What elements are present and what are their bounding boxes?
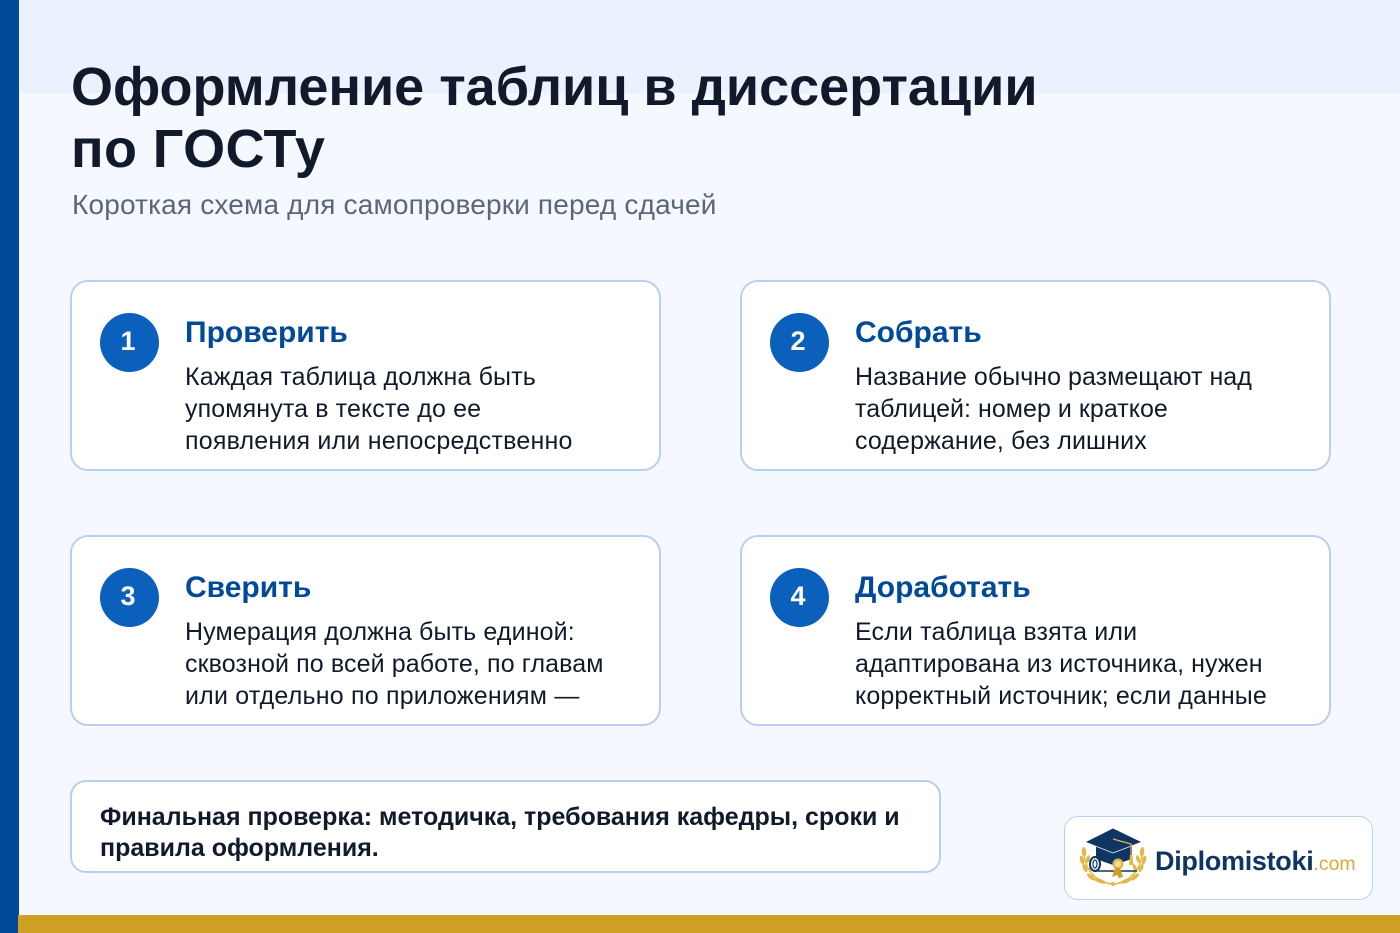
left accent bar [0,0,19,933]
step 3 heading: Сверить [185,571,311,604]
logo card [1064,816,1373,900]
title: Оформление таблиц в диссертации [71,57,1038,117]
step 1 text: упомянута в тексте до ее [185,395,481,423]
step 4 text [855,618,1267,710]
step 4 heading: Доработать [855,571,1031,604]
callout text [100,803,900,862]
logo wordmark: Diplomistoki.com [1155,846,1356,876]
step number 2: 2 [790,326,806,356]
icon: graduation cap with laurel wreath [1080,828,1146,886]
step number 1 [100,313,159,372]
step 2 text: таблицей: номер и краткое [855,395,1168,423]
subtitle: Короткая схема для самопроверки перед сдачей [72,189,717,220]
step 1 text [185,363,573,455]
step 2 text: Название обычно размещают над [855,363,1252,391]
panel: step 3 [70,535,661,726]
step 2 heading: Собрать [855,316,982,349]
callout text: Финальная проверка: методичка, требования кафедры, сроки и [100,803,900,831]
step 1 heading: Проверить [185,316,348,349]
step 3 text [185,618,604,710]
step 4 text: адаптирована из источника, нужен [855,650,1263,678]
step number 4: 4 [790,581,806,611]
callout: final check [70,780,941,873]
step number 1: 1 [120,326,136,356]
step number 3 [100,568,159,627]
step number 4 [770,568,829,627]
step 1 text: появления или непосредственно [185,427,573,455]
title [71,57,1038,179]
step 3 text: сквозной по всей работе, по главам [185,650,604,678]
bottom gold bar [18,915,1400,933]
step 2 text: содержание, без лишних [855,427,1147,455]
step 4 text: корректный источник; если данные [855,682,1267,710]
step 2 text [855,363,1252,455]
step 3 text: или отдельно по приложениям — [185,682,580,710]
title: по ГОСТу [71,119,325,179]
step 3 text: Нумерация должна быть единой: [185,618,575,646]
panel: step 4 [740,535,1331,726]
panel: step 2 [740,280,1331,471]
top header band [18,0,1400,93]
step number 3: 3 [120,581,136,611]
step 4 text: Если таблица взята или [855,618,1137,646]
callout text: правила оформления. [100,834,379,862]
step number 2 [770,313,829,372]
step 1 text: Каждая таблица должна быть [185,363,536,391]
panel: step 1 [70,280,661,471]
